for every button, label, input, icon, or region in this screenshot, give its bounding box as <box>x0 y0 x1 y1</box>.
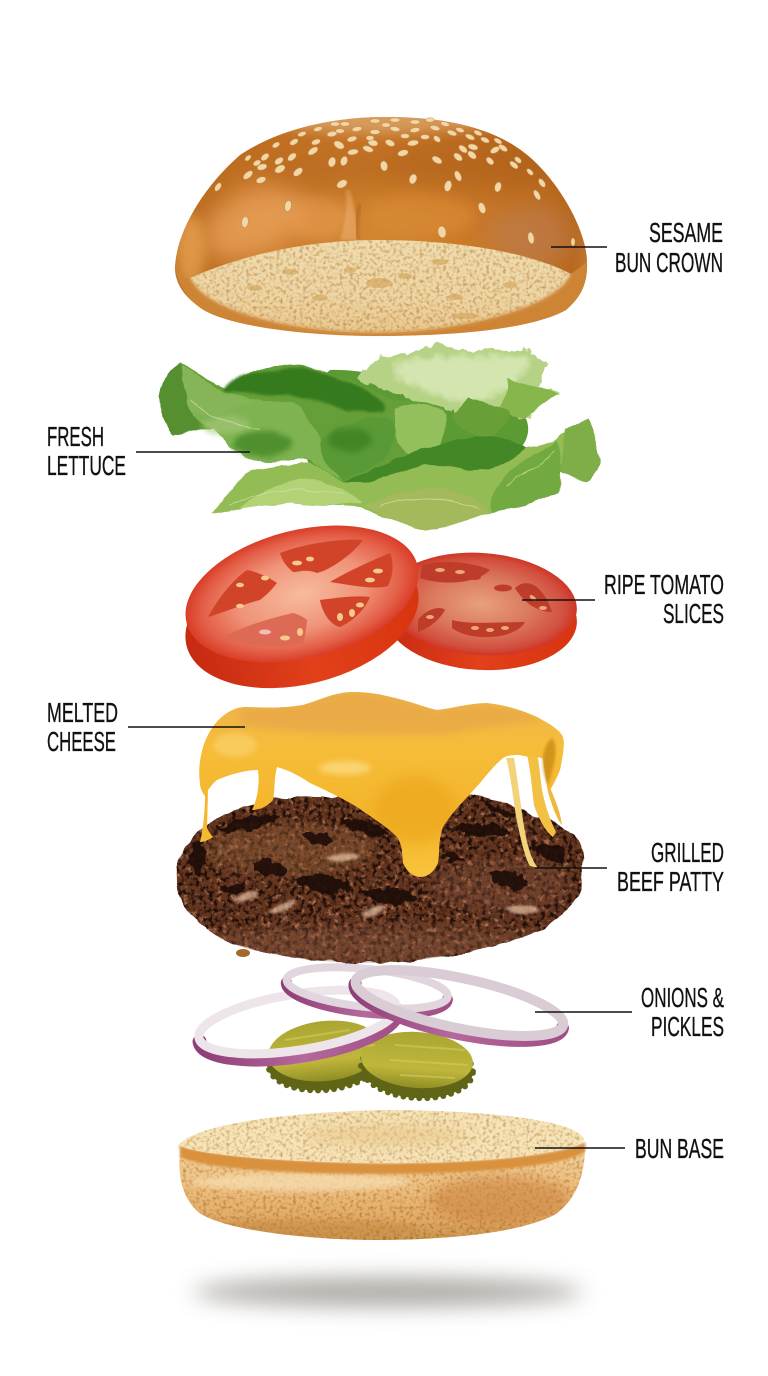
cheese strands on the right <box>506 752 562 868</box>
floating shadow <box>193 1277 583 1307</box>
label: fresh lettuce: LETTUCE <box>47 450 126 481</box>
melted cheese <box>199 692 564 877</box>
toasted rim <box>179 1142 585 1174</box>
exploded burger infographic <box>48 117 724 1320</box>
middle onion ring <box>284 961 450 1020</box>
front tomato slice <box>170 503 434 711</box>
grilled beef patty <box>177 793 583 965</box>
upper left leaf <box>160 362 448 480</box>
label: onions and pickles <box>535 982 724 1042</box>
label: fresh lettuce <box>47 421 250 481</box>
label: onions and pickles: PICKLES <box>651 1011 724 1042</box>
label: melted cheese: CHEESE <box>47 726 116 757</box>
label: grilled beef patty <box>535 837 724 897</box>
bun crust edge under the cut <box>176 262 587 336</box>
right onion ring <box>349 957 568 1054</box>
grease drip <box>236 949 250 957</box>
label: ripe tomato slices: SLICES <box>663 598 724 629</box>
label: sesame bun crown <box>551 217 723 278</box>
label: melted cheese: MELTED <box>47 697 118 728</box>
toasted top face <box>179 1110 584 1163</box>
back tomato slice <box>382 546 580 675</box>
left onion ring <box>195 979 402 1071</box>
label: sesame bun crown: SESAME <box>649 217 723 248</box>
sesame bun crown <box>175 98 587 336</box>
label: ripe tomato slices <box>522 569 724 629</box>
label: melted cheese <box>47 697 245 757</box>
pickles <box>264 1015 475 1102</box>
lower leaf <box>210 418 600 530</box>
cut crumb face <box>190 240 571 333</box>
fresh lettuce <box>160 343 600 530</box>
bun base <box>179 1110 585 1240</box>
label: fresh lettuce: FRESH <box>47 421 104 452</box>
ripe tomato slices <box>170 503 580 711</box>
lettuce backing mass <box>304 370 528 487</box>
red onion rings and pickles <box>195 957 568 1102</box>
label: grilled beef patty: GRILLED <box>651 837 724 868</box>
sesame seeds <box>213 118 575 246</box>
upper pale leaf <box>357 343 560 418</box>
